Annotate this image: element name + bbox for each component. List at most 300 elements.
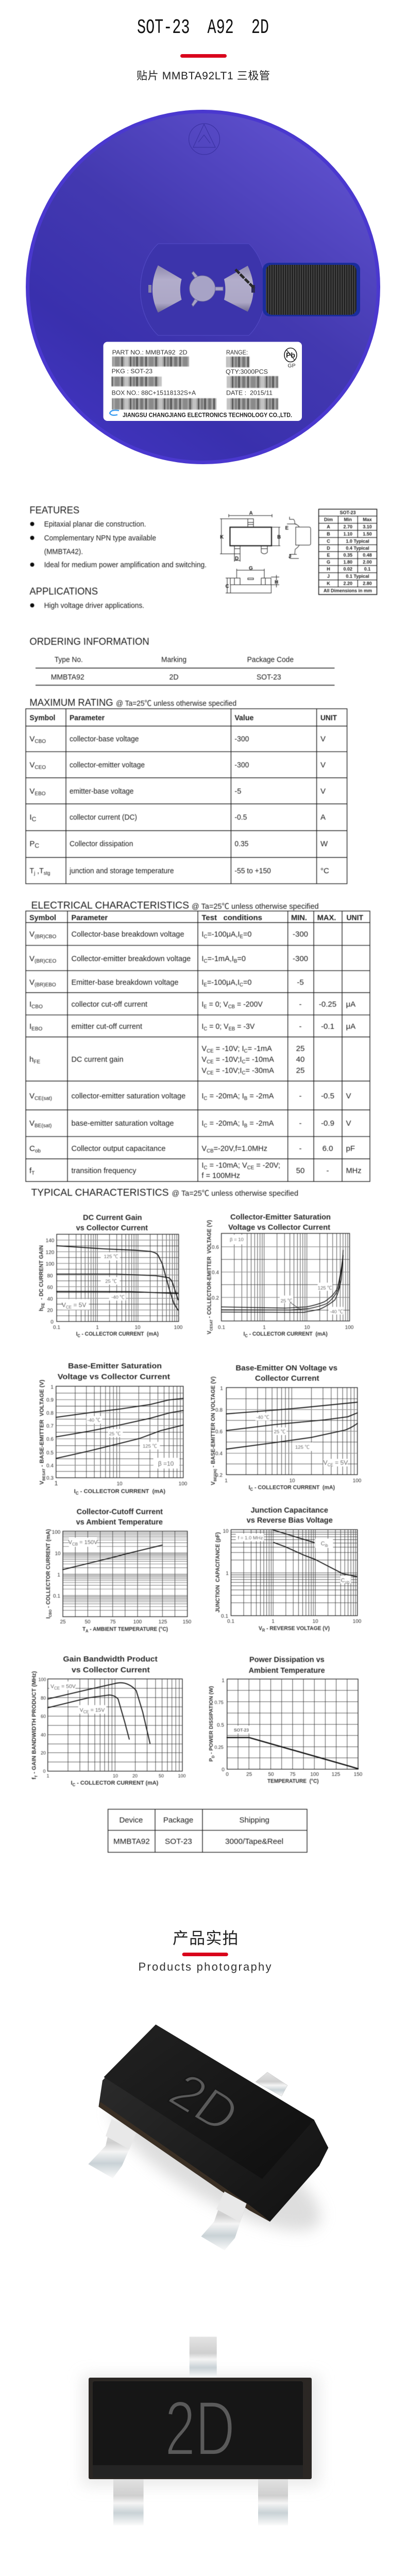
chart: power dissipation vs ambient temperature: 0.25: [214, 1744, 224, 1750]
table: SOT-23 dimensions: B: [327, 531, 330, 536]
electrical characteristics table: -: [299, 1000, 302, 1009]
maximum rating table: V: [320, 760, 326, 769]
table: device shipping: Device: [119, 1816, 143, 1824]
chart: base-emitter on voltage: [210, 1364, 362, 1492]
dimension letters: [220, 511, 292, 589]
red divider bar: [182, 1953, 228, 1956]
chart: collector-emitter saturation voltage: [206, 1213, 354, 1338]
chart: gain bandwidth product vs collector current: 40: [41, 1732, 46, 1737]
chart: base-emitter saturation voltage: [39, 1362, 188, 1496]
chart: collector cutoff current vs ambient temperature: ICBO - COLLECTOR CURRENT (mA): [45, 1529, 53, 1619]
blurred barcodes: [112, 357, 278, 410]
electrical characteristics table: IC=-100μA,IE=0: [201, 930, 251, 940]
maximum rating table: UNIT: [320, 714, 337, 722]
chart: collector cutoff current vs ambient temperature: 25: [60, 1619, 66, 1625]
chart: junction capacitance vs reverse bias voltage: JUNCTION CAPACITANCE (pF): [215, 1532, 221, 1613]
electrical characteristics table: 25: [296, 1044, 304, 1053]
table: SOT-23 dimensions: 2.00: [363, 560, 372, 565]
electrical characteristics table: -0.5: [321, 1092, 334, 1100]
electrical characteristics table: 50: [296, 1166, 304, 1175]
chart: DC current gain vs collector current: hFE - DC CURRENT GAIN: [38, 1245, 45, 1311]
table: SOT-23 dimensions: 1.0 Typical: [346, 538, 369, 544]
maximum rating table: emitter-base voltage: [70, 787, 133, 795]
feature list: [44, 520, 207, 569]
electrical characteristics table: VCE = -10V;IC= -10mA: [201, 1055, 274, 1065]
lead: left: [88, 2119, 136, 2178]
ordering table: 2D: [169, 673, 179, 682]
chart: DC current gain vs collector current: 0.1: [53, 1325, 60, 1331]
label text: GP: GP: [287, 363, 296, 369]
chart: power dissipation vs ambient temperature: 1: [222, 1678, 225, 1684]
side view: [287, 517, 311, 558]
chart: base-emitter saturation voltage: β =10: [158, 1460, 174, 1467]
table: SOT-23 dimensions: G: [327, 560, 330, 565]
chart: DC current gain vs collector current: 100: [174, 1325, 183, 1331]
feature list: Ideal for medium power amplification and switching.: [44, 561, 207, 569]
chart: base-emitter saturation voltage: 125 ℃: [143, 1444, 157, 1449]
chart: DC current gain vs collector current: 20: [47, 1308, 53, 1314]
electrical characteristics table: -0.9: [321, 1119, 334, 1128]
subtitle: 贴片 MMBTA92LT1 三极管: [137, 70, 270, 82]
chart: base-emitter saturation voltage: 0.8: [46, 1411, 54, 1416]
chart: power dissipation vs ambient temperature: 0: [226, 1772, 229, 1777]
electrical characteristics table: V(BR)CBO: [29, 930, 56, 940]
electrical characteristics table: base-emitter saturation voltage: [71, 1119, 174, 1128]
lead: top: [190, 2337, 217, 2378]
soft shadow: [82, 2375, 319, 2486]
maximum rating table: VCBO: [29, 735, 46, 744]
electrical characteristics table: -: [299, 1144, 302, 1153]
electrical characteristics table: Test conditions: [201, 913, 262, 922]
electrical characteristics table: -0.25: [319, 1000, 336, 1009]
maximum rating table: collector-base voltage: [70, 735, 139, 743]
chart: power dissipation vs ambient temperature: 150: [354, 1772, 363, 1777]
maximum rating table: VCEO: [29, 760, 46, 770]
label text: quantity: QTY:3000PCS: [226, 368, 268, 375]
chart: junction capacitance vs reverse bias voltage: 0.1: [227, 1619, 234, 1624]
maximum rating table: Tj ,Tstg: [29, 867, 50, 876]
chart: collector cutoff current vs ambient temperature: [45, 1507, 192, 1633]
maximum rating table: V: [320, 735, 326, 743]
heading: features: FEATURES: [29, 505, 79, 516]
label text: box number: BOX NO.: 88C+15118132S+A: [112, 389, 196, 397]
chart: junction capacitance vs reverse bias voltage: VR - REVERSE VOLTAGE (V): [259, 1625, 330, 1633]
electrical characteristics table: emitter cut-off current: [71, 1022, 143, 1031]
electrical characteristics table: f = 100MHz: [201, 1172, 240, 1180]
chart: base-emitter saturation voltage: 1: [50, 1385, 54, 1391]
chart: base-emitter saturation voltage: 25 ℃: [109, 1431, 121, 1437]
electrical characteristics table: transition frequency: [71, 1166, 137, 1175]
chart: DC current gain vs collector current: 25 ℃: [105, 1279, 117, 1284]
dimension letters: K: [220, 535, 224, 540]
chart: DC current gain vs collector current: 120: [46, 1250, 55, 1256]
heading: electrical characteristics: @ Ta=25℃ unless otherwise specified: [192, 902, 319, 911]
heading english: Products photography: [138, 1960, 271, 1973]
chart: DC current gain vs collector current: IC - COLLECTOR CURRENT (mA): [76, 1331, 159, 1338]
table: device shipping: Shipping: [240, 1816, 269, 1824]
lead: bottom left: [113, 2476, 144, 2526]
chart: gain bandwidth product vs collector current: 1: [46, 1773, 49, 1778]
chart: collector cutoff current vs ambient temperature: 100: [52, 1530, 61, 1535]
chart: power dissipation vs ambient temperature: 0.75: [214, 1700, 224, 1705]
marking 2D: 2D: [165, 2385, 235, 2471]
chart: DC current gain vs collector current: 125 ℃: [104, 1254, 118, 1260]
heading: electrical characteristics: ELECTRICAL CHARACTERISTICS: [31, 901, 189, 911]
chart: DC current gain vs collector current: 140: [46, 1238, 55, 1244]
maximum rating table: collector current (DC): [70, 813, 137, 822]
chart: junction capacitance vs reverse bias voltage: 0.1: [221, 1614, 228, 1619]
embossed logo: [189, 124, 219, 155]
electrical characteristics table: V: [346, 1119, 351, 1128]
table: device shipping: MMBTA92: [113, 1837, 150, 1846]
electrical characteristics table: IC=-1mA,IB=0: [201, 955, 246, 964]
lead: far top right: [256, 2072, 287, 2096]
chart: base-emitter on voltage: -40 ℃: [256, 1415, 269, 1420]
chart: base-emitter on voltage: 0.2: [215, 1473, 223, 1479]
table: SOT-23 dimensions: 2.20: [344, 581, 352, 586]
table: SOT-23 dimensions: 1.10: [344, 531, 352, 536]
chart: collector cutoff current vs ambient temperature: 100: [133, 1619, 142, 1625]
chart: base-emitter saturation voltage: IC - COLLECTOR CURRENT (mA): [74, 1488, 165, 1496]
electrical characteristics table: UNIT: [346, 913, 363, 922]
ordering table: Package Code: [247, 655, 294, 664]
electrical characteristics table: collector cut-off current: [71, 1000, 148, 1009]
reel label: [103, 342, 302, 421]
datasheet: all blurred scan content: [26, 505, 377, 1852]
chart: junction capacitance vs reverse bias voltage: 10: [223, 1529, 229, 1534]
electrical characteristics table: IC = -10mA; VCE = -20V;: [201, 1161, 280, 1171]
chart: collector cutoff current vs ambient temperature: 0.1: [53, 1594, 60, 1599]
reel disc: [26, 110, 380, 464]
chart: collector-emitter saturation voltage: Voltage vs Collector Current: [228, 1223, 330, 1232]
maximum rating table: -55 to +150: [234, 867, 271, 875]
lead: bottom right: [258, 2476, 288, 2526]
chart: collector-emitter saturation voltage: -40 ℃: [330, 1309, 343, 1315]
ordering information section: [29, 637, 334, 685]
chart: DC current gain vs collector current: [38, 1213, 183, 1338]
chart: DC current gain vs collector current: DC Current Gain: [83, 1213, 142, 1222]
heading: maximum rating: MAXIMUM RATING: [29, 698, 113, 708]
photo 2: SOT-23 chip top view with marking: [82, 2337, 319, 2526]
electrical characteristics table: -: [299, 1092, 302, 1100]
table: SOT-23 dimensions: K: [327, 581, 330, 586]
electrical characteristics table: Parameter: [71, 913, 108, 922]
chart: base-emitter on voltage: 1: [220, 1386, 223, 1392]
chart: collector cutoff current vs ambient temperature: vs Ambient Temperature: [76, 1518, 163, 1527]
heading: electrical characteristics: [31, 901, 319, 911]
chart: junction capacitance vs reverse bias voltage: Cob: [341, 1578, 350, 1585]
dimension letters: E: [285, 526, 289, 531]
ordering table: [36, 655, 334, 685]
chart: power dissipation vs ambient temperature: Power Dissipation vs: [249, 1655, 325, 1664]
chart: collector cutoff current vs ambient temperature: 50: [84, 1619, 91, 1625]
chart: power dissipation vs ambient temperature: 0: [222, 1767, 225, 1773]
chart: junction capacitance vs reverse bias voltage: [215, 1506, 362, 1633]
heading chinese: 产品实拍: [173, 1929, 238, 1947]
table: SOT-23 dimensions: 2.80: [363, 581, 372, 586]
chart: base-emitter on voltage: VBE(ON) - BASE-EMITTER ON VOLTAGE (V): [210, 1376, 217, 1485]
chart: collector-emitter saturation voltage: 0.4: [212, 1270, 219, 1276]
chart: gain bandwidth product vs collector current: 100: [38, 1677, 46, 1682]
chart: power dissipation vs ambient temperature: 125: [332, 1772, 341, 1777]
chart: collector cutoff current vs ambient temperature: 75: [110, 1619, 116, 1625]
electrical characteristics table: Collector-base breakdown voltage: [71, 930, 184, 939]
chart: collector-emitter saturation voltage: β = 10: [230, 1237, 244, 1243]
maximum rating table: PC: [29, 840, 39, 850]
dimension letters: D: [235, 556, 239, 562]
electrical characteristics table: V(BR)CEO: [29, 955, 56, 964]
chart: gain bandwidth product vs collector current: 80: [41, 1696, 46, 1701]
chart: gain bandwidth product vs collector current: IC - COLLECTOR CURRENT (mA): [71, 1780, 159, 1787]
electrical characteristics table: collector-emitter saturation voltage: [71, 1092, 185, 1100]
maximum rating table: V: [320, 787, 326, 795]
electrical characteristics table: MIN.: [291, 913, 307, 922]
lead: right: [201, 2192, 247, 2250]
chart: DC current gain vs collector current: 10: [134, 1325, 141, 1331]
table: SOT-23 dimensions: E: [327, 552, 330, 557]
feature list: Epitaxial planar die construction.: [44, 520, 146, 529]
chart: collector-emitter saturation voltage: 1: [263, 1325, 266, 1331]
dimension letters: G: [249, 566, 253, 571]
chart: gain bandwidth product vs collector current: 0: [43, 1769, 46, 1774]
product image: blue tape reel: [26, 110, 380, 464]
maximum rating table: W: [320, 840, 328, 849]
electrical characteristics table: ICBO: [29, 1000, 43, 1010]
package body: [89, 2378, 312, 2479]
chart: gain bandwidth product vs collector current: Gain Bandwidth Product: [63, 1655, 158, 1664]
maximum rating table: IC: [29, 813, 37, 823]
table: SOT-23 dimensions: 0.1: [364, 567, 370, 572]
heading: typical characteristics: TYPICAL CHARACTERISTICS: [31, 1188, 169, 1198]
electrical characteristics table: IEBO: [29, 1022, 43, 1032]
chart: base-emitter saturation voltage: 0.7: [46, 1423, 54, 1429]
ordering table: Type No.: [55, 655, 83, 664]
chart: collector-emitter saturation voltage: Collector-Emitter Saturation: [230, 1213, 331, 1222]
table: SOT-23 dimensions: 2.70: [344, 524, 352, 530]
chart: base-emitter saturation voltage: 0.5: [46, 1450, 54, 1456]
chart: DC current gain vs collector current: 40: [47, 1297, 53, 1302]
ordering table: Marking: [161, 655, 186, 664]
table: device shipping: Package: [163, 1816, 193, 1824]
electrical characteristics table: pF: [346, 1144, 355, 1153]
hub windows: [152, 265, 182, 313]
hub centre: [190, 272, 223, 307]
chart: junction capacitance vs reverse bias voltage: Junction Capacitance: [251, 1506, 328, 1515]
maximum rating table: 0.35: [234, 840, 248, 849]
chart: collector cutoff current vs ambient temperature: TA - AMBIENT TEMPERATURE (°C): [82, 1626, 168, 1633]
chart: gain bandwidth product vs collector current: 100: [178, 1773, 186, 1778]
chart: base-emitter saturation voltage: 100: [179, 1481, 188, 1487]
icon: G logo: [110, 410, 119, 415]
chart: gain bandwidth product vs collector current: 20: [132, 1773, 138, 1778]
electrical characteristics table: VCE = -10V; IC= -1mA: [201, 1044, 272, 1054]
electrical characteristics table: 6.0: [323, 1144, 333, 1153]
electrical characteristics table: V: [346, 1092, 351, 1100]
table: SOT-23 dimensions: 1.80: [344, 560, 352, 565]
electrical characteristics table: Cob: [29, 1144, 41, 1154]
electrical characteristics table: 25: [296, 1066, 304, 1075]
chart: collector cutoff current vs ambient temperature: 150: [183, 1619, 192, 1625]
label text: range: RANGE:: [226, 349, 248, 356]
maximum rating table: °C: [320, 867, 329, 875]
electrical characteristics table: IE=-100μA,IC=0: [201, 978, 251, 988]
chart: DC current gain vs collector current: 0: [50, 1319, 54, 1325]
icon: Pb free: [284, 348, 297, 362]
bottom view: [226, 569, 279, 593]
dimension letters: H: [275, 580, 278, 585]
table: SOT-23 dimensions: H: [327, 567, 330, 572]
chart: base-emitter on voltage: 10: [289, 1478, 295, 1484]
chart: base-emitter saturation voltage: Base-Emitter Saturation: [68, 1362, 162, 1370]
features section: [29, 505, 207, 610]
chart: power dissipation vs ambient temperature: 0.5: [217, 1722, 224, 1728]
table: device shipping: [108, 1809, 307, 1852]
chart: base-emitter saturation voltage: 0.6: [46, 1437, 54, 1443]
table: SOT-23 dimensions: 0.4 Typical: [346, 546, 369, 551]
chart: gain bandwidth product vs collector current: vs Collector Current: [72, 1666, 150, 1674]
package body: [98, 2025, 328, 2222]
soft shadow: [96, 2073, 337, 2255]
maximum rating table: -300: [234, 735, 249, 743]
chart: collector-emitter saturation voltage: VCESAT - COLLECTOR-EMITTER VOLTAGE (V): [206, 1220, 213, 1334]
chart: gain bandwidth product vs collector current: VCE = 50V: [50, 1684, 76, 1691]
maximum rating table: Value: [234, 714, 253, 722]
table: SOT-23 dimensions: Max: [363, 517, 372, 522]
heading: applications: APPLICATIONS: [29, 586, 98, 597]
chart: base-emitter on voltage: IC - COLLECTOR CURRENT (mA): [249, 1485, 335, 1492]
chart: junction capacitance vs reverse bias voltage: 1: [226, 1571, 229, 1577]
chart: base-emitter saturation voltage: 0.4: [46, 1463, 54, 1469]
leads in front of body: [106, 2119, 136, 2149]
chart: base-emitter on voltage: 25 ℃: [274, 1429, 286, 1435]
table: SOT-23 dimensions: 0.35: [344, 552, 352, 557]
chart: base-emitter on voltage: 1: [225, 1478, 228, 1484]
bullets: [30, 522, 34, 607]
table: SOT-23 dimensions: 0.02: [344, 567, 352, 572]
maximum rating table: Collector dissipation: [70, 840, 133, 849]
chart: junction capacitance vs reverse bias voltage: 100: [353, 1619, 362, 1624]
table: SOT-23 dimensions: SOT-23: [340, 510, 356, 515]
electrical characteristics table: -300: [293, 930, 308, 939]
chart: base-emitter saturation voltage: VBESAT - BASE-EMITTER VOLTAGE (V): [39, 1380, 46, 1485]
chart: collector cutoff current vs ambient temperature: 125: [159, 1619, 167, 1625]
chart: power dissipation vs ambient temperature: PD - POWER DISSIPATION (W): [209, 1686, 215, 1761]
electrical characteristics table: Emitter-base breakdown voltage: [71, 978, 178, 987]
icon: Pb free: Pb: [286, 351, 295, 359]
maximum rating table: -5: [234, 787, 241, 795]
chart: base-emitter saturation voltage: 0.3: [46, 1476, 54, 1481]
chart: base-emitter saturation voltage: 10: [116, 1481, 123, 1487]
table: SOT-23 dimensions: J: [327, 574, 330, 579]
chart: power dissipation vs ambient temperature: SOT-23: [234, 1727, 249, 1733]
wound carrier tape: [263, 263, 360, 316]
chart: base-emitter on voltage: 125 ℃: [295, 1445, 310, 1450]
maximum rating table: -300: [234, 760, 249, 769]
heading: ordering information: ORDERING INFORMATION: [29, 637, 149, 648]
electrical characteristics table: -: [299, 1119, 302, 1128]
chart: junction capacitance vs reverse bias voltage: 10: [312, 1619, 318, 1624]
electrical characteristics table: V(BR)EBO: [29, 978, 56, 988]
electrical characteristics table: VCB=-20V,f=1.0MHz: [201, 1144, 267, 1154]
table: device shipping: 3000/Tape&Reel: [225, 1837, 283, 1846]
chart: power dissipation vs ambient temperature: 100: [310, 1772, 319, 1777]
chart: power dissipation vs ambient temperature: [209, 1655, 363, 1785]
label text: manufacturer: JIANGSU CHANGJIANG ELECTRONICS TECHNOLOGY CO.,LTD.: [123, 411, 292, 418]
chart: power dissipation vs ambient temperature: 50: [268, 1772, 274, 1777]
electrical characteristics table: -300: [293, 955, 308, 963]
chart: power dissipation vs ambient temperature: 75: [290, 1772, 296, 1777]
electrical characteristics table: MAX.: [317, 913, 336, 922]
heading: maximum rating: [29, 698, 236, 708]
electrical characteristics table: Collector output capacitance: [71, 1144, 165, 1153]
table: SOT-23 dimensions: C: [327, 538, 330, 544]
reel hub: [140, 244, 266, 335]
maximum rating table: VEBO: [29, 787, 46, 796]
top view: [220, 514, 280, 562]
chart: DC current gain vs collector current: 100: [46, 1262, 55, 1267]
chart: base-emitter saturation voltage: 0.9: [46, 1398, 54, 1403]
chart: power dissipation vs ambient temperature: Ambient Temperature: [249, 1666, 325, 1675]
chart: collector-emitter saturation voltage: 10: [304, 1325, 310, 1331]
chart: base-emitter on voltage: 100: [353, 1478, 362, 1484]
chart: base-emitter on voltage: 0.8: [215, 1408, 223, 1413]
dimension letters: C: [226, 584, 229, 589]
feature list: Complementary NPN type available: [44, 534, 156, 543]
chart: gain bandwidth product vs collector current: VCE = 15V: [80, 1707, 105, 1714]
maximum rating table: [26, 709, 347, 884]
maximum rating section: [26, 698, 347, 884]
chart: base-emitter on voltage: Base-Emitter ON Voltage vs: [235, 1364, 337, 1372]
electrical characteristics table: -0.1: [321, 1022, 334, 1031]
electrical characteristics table: MHz: [346, 1166, 362, 1175]
electrical characteristics table: -: [327, 1166, 329, 1175]
electrical characteristics table: VCE = -10V;IC= -30mA: [201, 1066, 274, 1076]
package top face: [104, 2025, 314, 2179]
maximum rating table: -0.5: [234, 813, 247, 822]
label text: package: PKG : SOT-23: [112, 368, 152, 375]
chart: gain bandwidth product vs collector current: 60: [41, 1714, 46, 1719]
maximum rating table: Symbol: [29, 714, 55, 722]
chart: collector-emitter saturation voltage: 100: [345, 1325, 354, 1331]
table: SOT-23 dimensions: Dim: [324, 517, 333, 522]
chart: base-emitter saturation voltage: -40 ℃: [87, 1418, 101, 1423]
heading: typical characteristics: [31, 1188, 298, 1198]
marking 2D: 2D: [159, 2063, 250, 2143]
dimension letters: A: [249, 511, 253, 516]
table: SOT-23 dimensions: All Dimensions in mm: [324, 588, 372, 594]
electrical characteristics table: IE = 0; VCB = -200V: [201, 1000, 263, 1010]
chart: base-emitter saturation voltage: 1: [55, 1480, 58, 1487]
electrical characteristics table: μA: [346, 1000, 355, 1009]
electrical characteristics table: -: [299, 1022, 302, 1031]
section heading: product photography: [138, 1929, 271, 1973]
photo 1: angled SOT-23 chip: [88, 2025, 337, 2255]
title: SOT-23 A92 2D: [137, 16, 269, 40]
dimension letters: J: [289, 554, 292, 560]
chart: DC current gain vs collector current: 60: [47, 1285, 53, 1291]
red divider bar: [180, 54, 227, 58]
table: SOT-23 dimensions: [319, 509, 377, 595]
chart: collector-emitter saturation voltage: 25 ℃: [281, 1298, 293, 1304]
chart: base-emitter saturation voltage: Voltage vs Collector Current: [58, 1372, 170, 1381]
chart: collector cutoff current vs ambient temperature: VCB = 150V: [69, 1539, 98, 1547]
chart: base-emitter on voltage: Collector Current: [255, 1374, 319, 1383]
table: SOT-23 dimensions: A: [327, 524, 330, 530]
ordering table: SOT-23: [257, 673, 281, 682]
chart: DC current gain vs collector current: 1: [96, 1325, 99, 1331]
label text: date: DATE : 2015/11: [226, 389, 273, 397]
chart: collector-emitter saturation voltage: 0.6: [212, 1245, 219, 1250]
